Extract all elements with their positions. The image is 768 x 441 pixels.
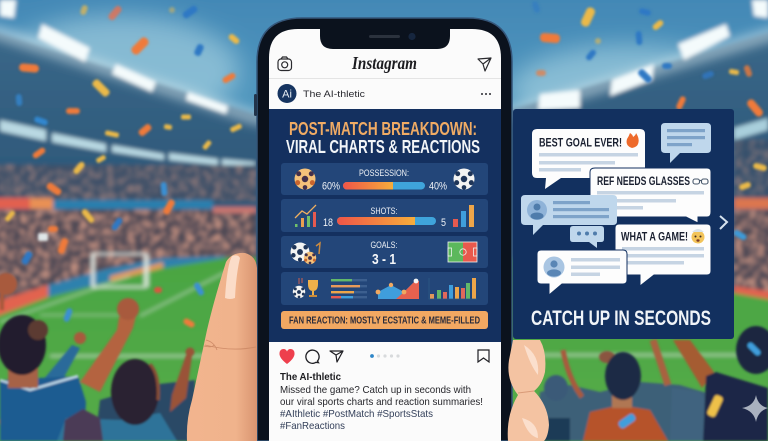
icon: user (527, 200, 547, 220)
avatar: Ai (282, 88, 292, 100)
heading: POST-MATCH BREAKDOWN: (289, 119, 477, 139)
possession bar (343, 182, 425, 190)
icon: heart (279, 349, 295, 364)
icon: camera (278, 57, 292, 70)
shots bar (337, 217, 436, 225)
icon: sparkle watermark (742, 395, 768, 422)
icon: left ball (294, 168, 316, 190)
fans at right (530, 326, 768, 441)
bubble: what a game (615, 224, 711, 286)
panel: post match breakdown (269, 109, 501, 342)
row: possession: 60% (322, 180, 340, 192)
panel: catch up in seconds (513, 109, 734, 339)
row: possession: POSSESSION: (359, 168, 409, 179)
phone body (257, 18, 512, 441)
instagram logo: Instagram (351, 53, 417, 73)
caption: #FanReactions (280, 421, 345, 432)
phone screen (269, 29, 501, 441)
icon: glasses (693, 179, 708, 184)
heading (286, 119, 480, 157)
post action icons (279, 349, 489, 364)
panel caption: CATCH UP IN SECONDS (531, 307, 711, 330)
fan reaction banner (281, 311, 488, 329)
bubble: ref needs glasses (590, 168, 711, 223)
phone notch (320, 29, 450, 49)
icon: mind blown emoji (692, 229, 704, 244)
row: shots: 5 (441, 217, 446, 229)
icon: right ball (454, 168, 474, 190)
caption (280, 371, 483, 432)
more dots (481, 93, 491, 95)
fans at left (0, 273, 195, 441)
row: goals: 3 - 1 (372, 251, 396, 268)
icon: share (330, 351, 343, 362)
icon: send (478, 58, 491, 71)
fan reaction banner: FAN REACTION: MOSTLY ECSTATIC & MEME-FILLED (289, 314, 480, 326)
caption: The AI-thletic (280, 371, 341, 383)
row: mini charts (281, 272, 488, 305)
carousel dots (370, 354, 400, 358)
icon: line and bars (295, 205, 316, 227)
row: possession (281, 163, 488, 195)
row: shots: 18 (323, 217, 333, 229)
icon: comment (306, 350, 319, 363)
hand: fingers (508, 340, 549, 441)
bar chart (429, 278, 477, 299)
icon: user (544, 256, 564, 278)
caption: #AIthletic #PostMatch #SportsStats (280, 409, 433, 420)
bubble: what a game: WHAT A GAME! (621, 232, 688, 244)
icon: balls (290, 242, 320, 264)
bubble: typing dots (570, 226, 604, 248)
phone (254, 18, 512, 441)
account name: The AI-thletic (303, 89, 365, 100)
caption: Missed the game? Catch up in seconds with (280, 385, 471, 396)
area chart (376, 279, 419, 299)
bubble: avatar white (537, 250, 627, 295)
avatar (278, 84, 296, 103)
bubble: best goal ever: BEST GOAL EVER! (539, 136, 622, 150)
icon: flame (627, 133, 639, 148)
row: shots: SHOTS: (370, 206, 398, 217)
row: goals (281, 236, 488, 268)
icon: bookmark (478, 350, 489, 362)
row: goals: GOALS: (370, 240, 398, 251)
hand: thumb (187, 253, 257, 441)
bubble: top light (661, 123, 711, 163)
icon: pitch (448, 242, 477, 262)
bubble: avatar light (521, 195, 617, 235)
icon: chevron (720, 216, 727, 229)
row: shots (281, 199, 488, 232)
row: possession: 40% (429, 180, 447, 192)
icon: ball and trophy (293, 278, 318, 298)
icon: bars (453, 205, 474, 227)
bubble: best goal ever (532, 129, 645, 189)
profile row (278, 84, 491, 103)
caption: our viral sports charts and reaction summaries! (280, 397, 483, 408)
horizontal bars chart (331, 279, 367, 298)
bubble: ref needs glasses: REF NEEDS GLASSES (597, 176, 690, 188)
instagram header (278, 53, 491, 73)
heading: VIRAL CHARTS & REACTIONS (286, 137, 480, 157)
